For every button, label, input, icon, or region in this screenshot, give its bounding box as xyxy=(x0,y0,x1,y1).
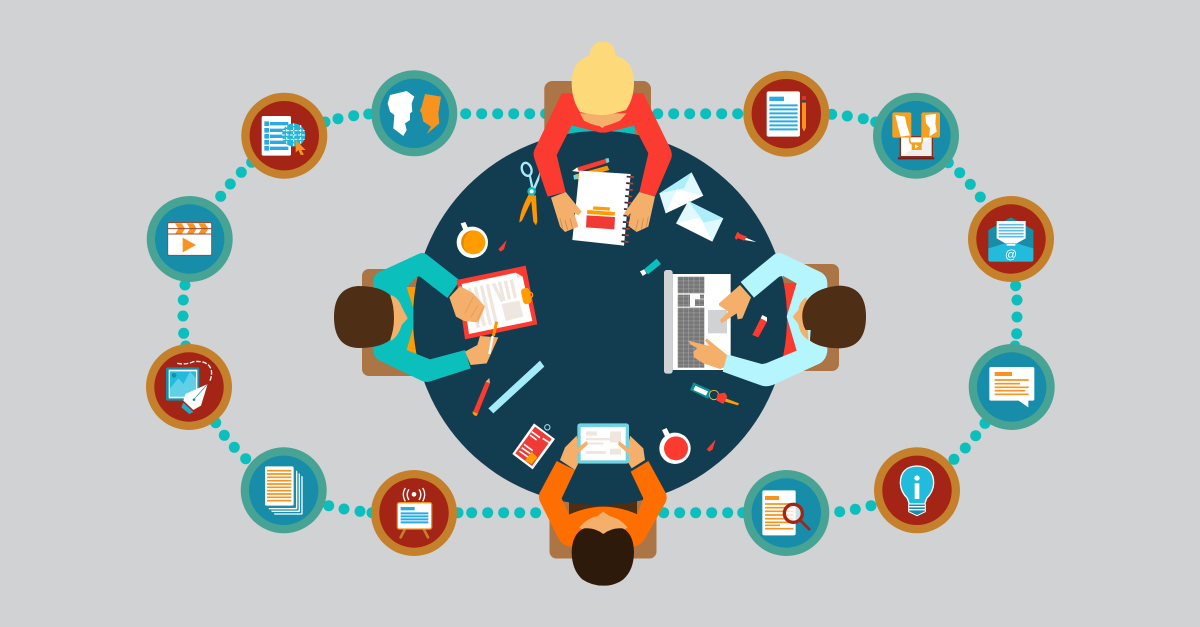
badge: picture and pen nib xyxy=(146,344,232,430)
badge: stacked pages xyxy=(241,447,327,533)
person at bottom: orange sweater xyxy=(512,423,716,586)
pencils xyxy=(572,158,609,180)
envelopes xyxy=(659,172,723,242)
badge: envelope with letter and at sign: @ xyxy=(1005,248,1017,262)
id badge xyxy=(512,423,555,469)
badge: two head silhouettes xyxy=(371,70,457,156)
arms and sweater xyxy=(539,461,667,547)
badge: presentation easel with broadcast signal xyxy=(371,470,457,556)
push pin xyxy=(735,232,756,242)
badge: document with magnifying glass xyxy=(743,470,829,556)
ruler xyxy=(488,361,544,413)
spiral notebook xyxy=(572,171,631,246)
small pen xyxy=(707,439,716,452)
person at right: pale blue sweater xyxy=(640,232,866,405)
hands xyxy=(560,436,645,470)
badge: envelope with letter and at sign xyxy=(968,196,1054,282)
chair and shirt backs behind table xyxy=(362,81,839,558)
badge: film clapper xyxy=(147,196,233,282)
red usb stick xyxy=(752,315,767,337)
hands and pen xyxy=(449,286,498,365)
push pin xyxy=(736,232,756,242)
small pen xyxy=(498,240,507,252)
person at top: red sweater, blonde hair xyxy=(534,41,672,197)
dotted connection ring xyxy=(178,108,1022,518)
head xyxy=(572,41,634,128)
badge: light bulb with info sign xyxy=(874,447,960,533)
teal usb stick xyxy=(640,259,661,276)
head xyxy=(334,286,408,348)
coffee cup, orange xyxy=(457,222,488,258)
badge: laptop with video and two portrait cards xyxy=(873,93,959,179)
laptop xyxy=(664,270,731,374)
key ring xyxy=(690,382,739,405)
red pencil xyxy=(473,378,490,416)
person at left: teal sweater xyxy=(334,253,537,382)
head xyxy=(572,512,634,586)
arms and sweater xyxy=(534,93,672,197)
arms and sweater xyxy=(373,253,471,382)
round table xyxy=(413,131,787,505)
badge: written document and pencil xyxy=(743,71,829,157)
badge: document with globe and cursor xyxy=(241,93,327,179)
scissors xyxy=(519,161,540,225)
tablet xyxy=(575,423,631,464)
hands xyxy=(688,285,751,369)
coffee cup, red xyxy=(659,428,691,464)
desk items near left person xyxy=(457,222,544,416)
head xyxy=(793,286,866,348)
badge: chat speech bubble xyxy=(969,344,1055,430)
arms and sweater xyxy=(723,253,827,386)
clipboard xyxy=(457,266,537,339)
desk items near top person xyxy=(519,158,756,246)
hands xyxy=(551,192,655,232)
